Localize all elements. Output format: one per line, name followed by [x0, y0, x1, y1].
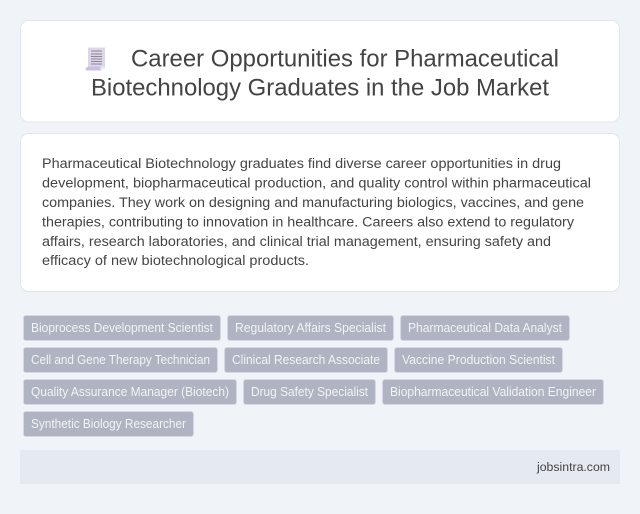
description text: companies. They work on designing and manufacturing biologics, vaccines, and gene [42, 195, 584, 211]
tag: Drug Safety Specialist [244, 380, 376, 404]
tag: Vaccine Production Scientist: Vaccine Production Scientist [402, 353, 555, 367]
tag: Bioprocess Development Scientist [24, 316, 220, 340]
tag: Cell and Gene Therapy Technician: Cell and Gene Therapy Technician [31, 353, 210, 367]
tag: Regulatory Affairs Specialist: Regulatory Affairs Specialist [235, 321, 386, 335]
tag: Cell and Gene Therapy Technician [24, 348, 218, 372]
tag: Regulatory Affairs Specialist [228, 316, 394, 340]
description text: therapies, contributing to innovation in healthcare. Careers also extend to regulatory [42, 214, 575, 230]
panel: header [20, 20, 620, 122]
tag: Clinical Research Associate [224, 348, 388, 372]
title: Biotechnology Graduates in the Job Market [91, 74, 549, 102]
footer [20, 450, 620, 484]
tag: Drug Safety Specialist: Drug Safety Specialist [251, 385, 368, 399]
tag: Quality Assurance Manager (Biotech) [24, 380, 236, 404]
title: Career Opportunities for Pharmaceutical [131, 46, 559, 72]
tag: Synthetic Biology Researcher [24, 412, 194, 436]
description text: affairs, research laboratories, and clinical trial management, ensuring safety and [42, 234, 551, 250]
description text: Pharmaceutical Biotechnology graduates find diverse career opportunities in drug [42, 156, 561, 172]
title [91, 46, 559, 102]
tag: Pharmaceutical Data Analyst [400, 316, 570, 340]
tag: Bioprocess Development Scientist: Bioprocess Development Scientist [31, 321, 213, 335]
description text: development, biopharmaceutical production, and quality control within pharmaceutical [42, 176, 591, 192]
tag: Quality Assurance Manager (Biotech): Quality Assurance Manager (Biotech) [31, 385, 229, 399]
description text: efficacy of new biotechnological products. [42, 253, 309, 269]
panel: description [20, 134, 620, 292]
tag: Synthetic Biology Researcher: Synthetic Biology Researcher [31, 417, 186, 431]
tag: Pharmaceutical Data Analyst: Pharmaceutical Data Analyst [408, 321, 562, 335]
tag: Biopharmaceutical Validation Engineer [382, 380, 604, 404]
description text [42, 156, 591, 269]
tag: Clinical Research Associate: Clinical Research Associate [232, 353, 380, 367]
tag: Vaccine Production Scientist [394, 348, 562, 372]
footer: jobsintra.com [536, 460, 610, 474]
icon: document scroll [86, 48, 105, 70]
tag: Biopharmaceutical Validation Engineer: Biopharmaceutical Validation Engineer [390, 385, 596, 399]
